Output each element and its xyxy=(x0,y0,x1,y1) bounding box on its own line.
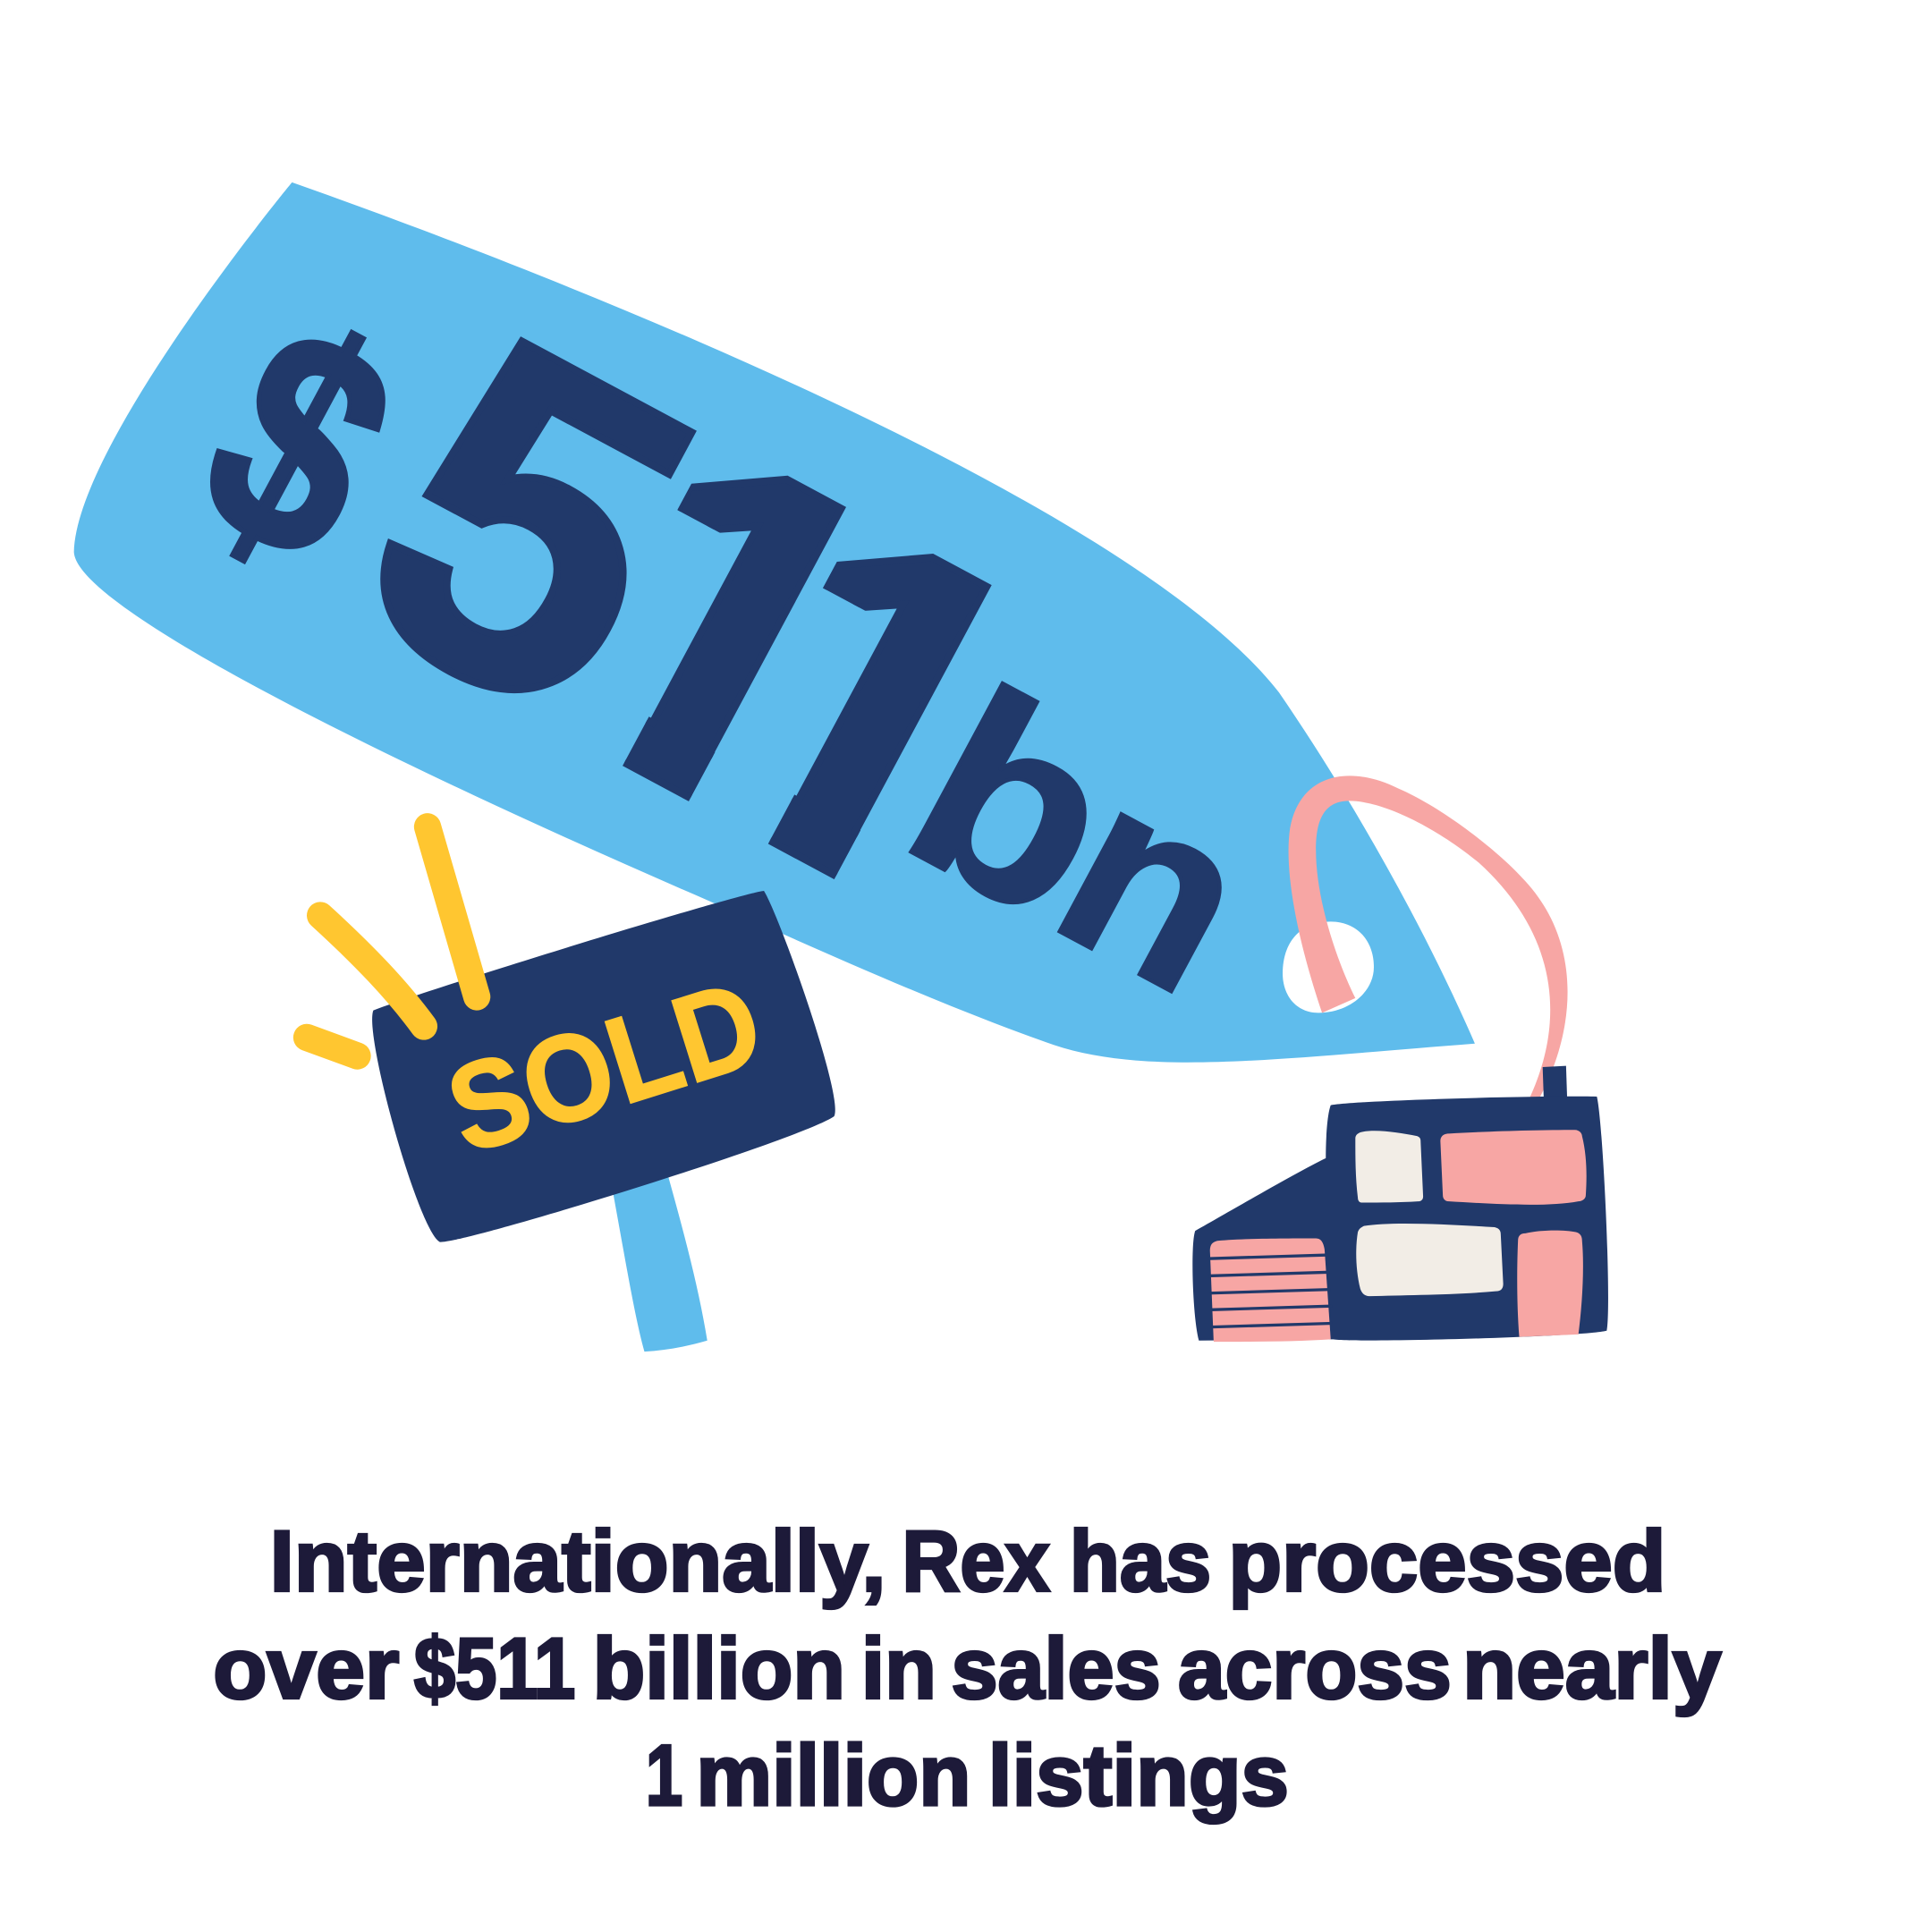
tag amount text xyxy=(210,329,1222,995)
digit one: 1 xyxy=(484,335,967,927)
caption line 2: billion xyxy=(593,1621,845,1716)
caption line 2 xyxy=(213,1621,1722,1716)
chimney xyxy=(1543,1066,1567,1103)
tag body xyxy=(74,182,1475,1063)
caption line 1: processed xyxy=(1228,1513,1665,1609)
house body xyxy=(1192,1097,1608,1341)
caption line 2: nearly xyxy=(1462,1621,1722,1716)
tag hole xyxy=(1283,921,1374,1013)
digit five: 5 xyxy=(293,237,767,818)
caption line 3 xyxy=(646,1728,1289,1824)
caption xyxy=(213,1513,1722,1824)
door pink xyxy=(1517,1231,1583,1337)
letter b: b xyxy=(868,632,1161,976)
sold text: SOLD xyxy=(433,953,777,1180)
caption line 1: has xyxy=(1070,1513,1211,1609)
caption line 2: $511 xyxy=(414,1621,575,1716)
window cream lower wide xyxy=(1356,1224,1504,1296)
caption line 3: 1 xyxy=(646,1728,682,1824)
yellow burst rays xyxy=(307,826,477,1056)
caption line 1 xyxy=(270,1513,1665,1609)
pink string loop xyxy=(1289,775,1568,1099)
caption line 2: across xyxy=(1178,1621,1452,1716)
sign post xyxy=(613,1171,708,1352)
window cream upper left xyxy=(1355,1131,1423,1202)
caption line 2: sales xyxy=(951,1621,1161,1716)
dollar sign: $ xyxy=(155,258,443,630)
striped garage door xyxy=(1208,1238,1332,1342)
caption line 3: million xyxy=(696,1728,971,1824)
house xyxy=(1192,1066,1608,1342)
caption line 1: Internationally, xyxy=(270,1513,886,1609)
caption line 2: in xyxy=(861,1621,936,1716)
window pink upper right xyxy=(1440,1130,1587,1205)
caption line 3: listings xyxy=(988,1728,1289,1824)
caption line 2: over xyxy=(213,1621,399,1716)
letter n: n xyxy=(1018,724,1292,1046)
price tag xyxy=(73,182,1475,1063)
digit one second: 1 xyxy=(630,413,1113,1004)
infographic canvas xyxy=(73,182,1723,1825)
sold sign board xyxy=(372,891,835,1242)
caption line 1: Rex xyxy=(902,1513,1050,1609)
